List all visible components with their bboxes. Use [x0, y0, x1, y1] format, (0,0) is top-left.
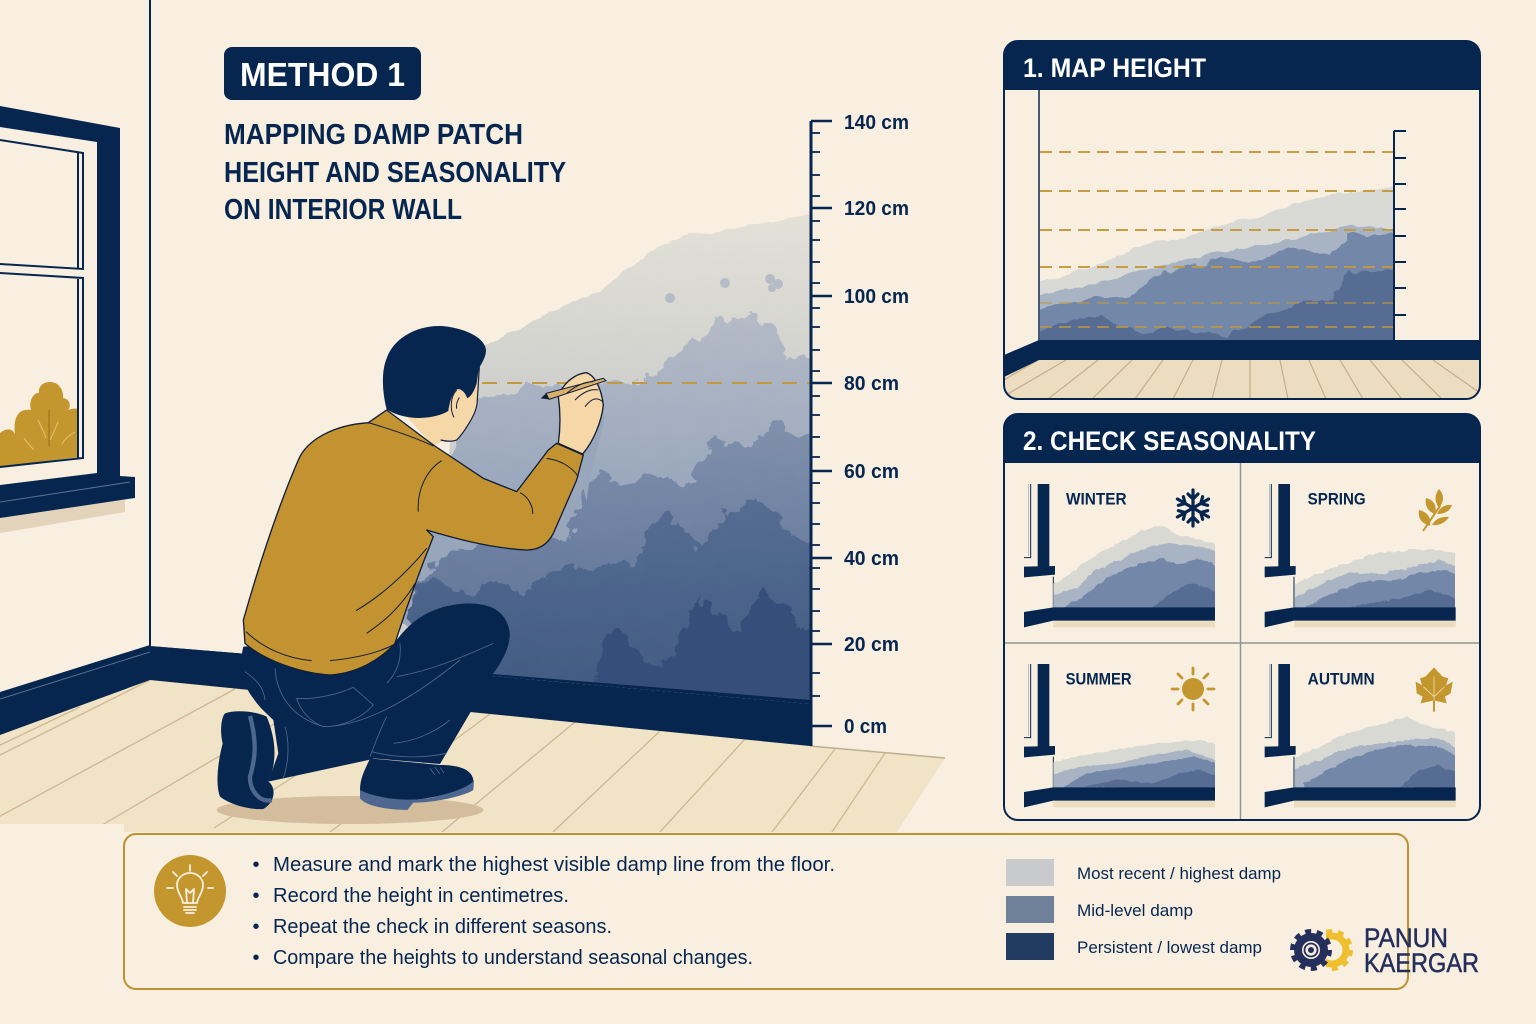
panel: tips and legend	[124, 834, 1408, 989]
season: spring	[1265, 484, 1460, 627]
fingers	[567, 382, 603, 407]
title	[224, 119, 566, 226]
summer label: SUMMER	[1066, 670, 1132, 689]
icon: sun	[1172, 668, 1214, 710]
bullet list	[252, 854, 835, 969]
logo: Panun Kaergar: PANUN	[1364, 923, 1448, 953]
legend	[1006, 859, 1281, 960]
ear	[448, 389, 467, 417]
icon: sprig	[1419, 489, 1452, 531]
legend: Persistent / lowest damp	[1077, 938, 1262, 957]
trouser seams	[245, 643, 493, 778]
panel 1 ruler	[1394, 131, 1406, 340]
minor ticks	[811, 133, 820, 696]
person measuring the wall	[217, 326, 606, 824]
major ticks	[811, 121, 832, 726]
season: autumn	[1265, 664, 1460, 807]
spring label: SPRING	[1308, 490, 1366, 509]
sweater fold lines	[246, 423, 578, 661]
bullet list: •	[252, 947, 260, 969]
season: summer	[1024, 664, 1220, 807]
bullet list: •	[252, 916, 260, 938]
panel: 1. map height	[1004, 41, 1480, 399]
room: wall corner, floor and skirting	[0, 0, 945, 832]
bullet list: •	[252, 854, 260, 876]
title: MAPPING DAMP PATCH	[224, 119, 523, 151]
height ruler	[811, 112, 909, 746]
front boot	[360, 758, 473, 800]
hand	[558, 373, 603, 454]
title: HEIGHT AND SEASONALITY	[224, 157, 566, 189]
panel 1 damp layers	[1030, 187, 1400, 345]
window with autumn tree	[0, 106, 135, 533]
badge: method 1: METHOD 1	[240, 56, 405, 93]
panel 2 heading: 2. CHECK SEASONALITY	[1023, 426, 1316, 456]
ruler labels: 60 cm	[844, 461, 899, 483]
panel 1 heading: 1. MAP HEIGHT	[1023, 53, 1206, 83]
bullet list: Record the height in centimetres.	[273, 885, 569, 907]
hair	[383, 326, 486, 418]
ruler labels: 40 cm	[844, 548, 899, 570]
ruler labels: 20 cm	[844, 634, 899, 656]
logo: Panun Kaergar	[1290, 928, 1478, 972]
bullet list: •	[252, 885, 260, 907]
ruler labels	[844, 112, 909, 738]
sweater	[243, 410, 583, 675]
logo: Panun Kaergar: KAERGAR	[1364, 948, 1479, 978]
season: winter	[1024, 484, 1220, 627]
icon: maple leaf	[1416, 667, 1453, 712]
back boot	[217, 711, 274, 809]
ruler labels: 120 cm	[844, 198, 909, 220]
bullet list: Repeat the check in different seasons.	[273, 916, 612, 938]
trousers	[241, 603, 510, 782]
legend: Mid-level damp	[1077, 901, 1193, 920]
ruler labels: 140 cm	[844, 112, 909, 134]
bullet list: Measure and mark the highest visible damp line from the floor.	[273, 854, 835, 876]
ruler labels: 0 cm	[844, 716, 887, 738]
badge: method 1	[224, 47, 421, 100]
damp streak near hand	[582, 413, 605, 502]
panel 1 dashed height lines	[1040, 152, 1394, 327]
floor shadow	[217, 796, 483, 824]
legend: Most recent / highest damp	[1077, 864, 1281, 883]
panel: 2. check seasonality	[1004, 414, 1480, 820]
pencil	[541, 378, 606, 399]
80 cm dashed mark line	[482, 382, 811, 384]
icon: snowflake	[1175, 490, 1211, 526]
jaw outline	[441, 367, 479, 441]
title: ON INTERIOR WALL	[224, 194, 462, 226]
ruler labels: 80 cm	[844, 373, 899, 395]
bullet list: Compare the heights to understand seasonal changes.	[273, 947, 753, 969]
icon: light bulb	[154, 855, 226, 927]
winter label: WINTER	[1066, 490, 1127, 509]
damp patch on wall	[151, 214, 810, 704]
autumn label: AUTUMN	[1308, 670, 1375, 689]
ruler labels: 100 cm	[844, 286, 909, 308]
skin: face and neck	[407, 367, 479, 446]
